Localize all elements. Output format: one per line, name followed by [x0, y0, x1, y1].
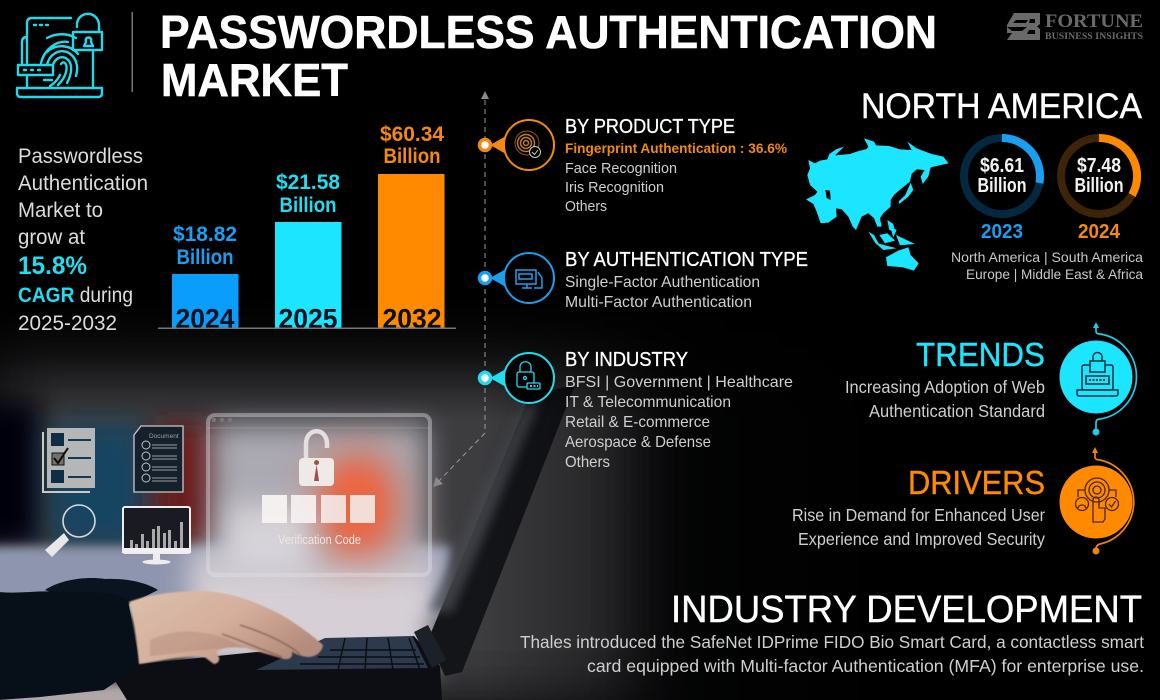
- bar 2032: 2032: [382, 303, 442, 334]
- industry development: INDUSTRY DEVELOPMENT: [671, 589, 1142, 631]
- bar 2025: $21.58: [276, 171, 340, 194]
- bar 2024: $18.82: [173, 223, 237, 246]
- segment: by industry: BY INDUSTRY: [565, 349, 688, 371]
- icon: document: Document: [149, 433, 179, 440]
- bar 2024: [172, 223, 238, 334]
- bar 2025: 2025: [278, 303, 338, 334]
- segment: by industry: [480, 349, 793, 471]
- segment: by industry: BFSI | Government | Healthcare: [565, 374, 793, 391]
- segment: by product type: Iris Recognition: [565, 179, 664, 196]
- bar 2032: Billion: [384, 145, 440, 168]
- drivers: Experience and Improved Security: [798, 529, 1045, 549]
- dashed timeline arrow: [433, 91, 489, 487]
- sleeve far: [45, 578, 158, 606]
- bar 2024: 2024: [176, 303, 235, 334]
- segment: by product type: Face Recognition: [565, 160, 677, 177]
- donut: 2024: [1061, 138, 1137, 243]
- segment: by authentication type: [480, 249, 808, 311]
- donut: 2023: $6.61: [980, 155, 1024, 177]
- icon: laptop fingerprint padlock: [17, 14, 102, 97]
- donut: 2023: Billion: [978, 175, 1026, 197]
- donut: 2024: 2024: [1078, 221, 1121, 243]
- regions list: North America | South America: [951, 249, 1143, 265]
- icon: monitor badge: [480, 253, 554, 303]
- CAGR text block: CAGR during: [18, 284, 133, 307]
- header divider: [132, 12, 133, 92]
- title: MARKET: [161, 54, 348, 106]
- map: Asia Pacific: [806, 138, 949, 271]
- heading: North America: NORTH AMERICA: [861, 87, 1143, 126]
- donut: 2023: 2023: [981, 221, 1023, 243]
- logo: Fortune Business Insights: BUSINESS INSIGHTS: [1045, 32, 1143, 42]
- CAGR text block: [18, 145, 148, 335]
- CAGR text block: 2025-2032: [18, 312, 117, 335]
- floating window: verification code: [207, 415, 430, 575]
- regions list: [951, 249, 1143, 282]
- drivers: Rise in Demand for Enhanced User: [792, 505, 1045, 525]
- donut: 2023: [964, 138, 1040, 243]
- logo: Fortune Business Insights: [1007, 12, 1143, 42]
- segment: by industry: IT & Telecommunication: [565, 394, 731, 411]
- CAGR text block: Authentication: [18, 172, 148, 195]
- fade overlays: [0, 295, 652, 409]
- trends: [845, 322, 1136, 436]
- logo: Fortune Business Insights: FORTUNE: [1045, 12, 1143, 32]
- bar 2032: $60.34: [380, 123, 444, 146]
- drivers: DRIVERS: [908, 464, 1045, 501]
- icon: padlock badge: [480, 353, 554, 403]
- trends: TRENDS: [916, 336, 1045, 373]
- segment: by industry: Retail & E-commerce: [565, 414, 710, 431]
- CAGR text block: Market to: [18, 199, 103, 222]
- trends: Increasing Adoption of Web: [845, 377, 1045, 397]
- drivers: [792, 447, 1134, 554]
- icon: magnifier: [45, 505, 95, 557]
- laptop base: [112, 625, 446, 700]
- segment: by authentication type: Multi-Factor Authentication: [565, 294, 752, 311]
- icon: monitor with bar chart: [122, 507, 191, 564]
- industry development: Thales introduced the SafeNet IDPrime FIDO Bio Smart Card, a contactless smart: [520, 632, 1144, 652]
- bar 2025: Billion: [280, 194, 336, 217]
- industry development: [520, 589, 1144, 676]
- sleeve: [0, 591, 140, 700]
- segment: by product type: [480, 116, 788, 215]
- icon: fingerprint touch badge: [1060, 447, 1134, 554]
- donut: 2024: Billion: [1074, 175, 1124, 197]
- icon: checklist: [43, 428, 95, 492]
- trends: Authentication Standard: [869, 401, 1045, 421]
- icon: document: [134, 426, 183, 492]
- bar 2032: [378, 123, 444, 334]
- segment: by product type: BY PRODUCT TYPE: [565, 116, 735, 138]
- CAGR text block: Passwordless: [18, 145, 143, 168]
- segment: by industry: Others: [565, 454, 610, 471]
- segment: by industry: Aerospace & Defense: [565, 434, 711, 451]
- laptop screen: [428, 385, 575, 676]
- industry development: card equipped with Multi-factor Authentication (MFA) for enterprise use.: [587, 656, 1144, 676]
- CAGR text block: 15.8%: [18, 252, 87, 280]
- title: [160, 6, 937, 106]
- CAGR text block: grow at: [18, 226, 85, 249]
- icon: laptop lock badge: [1060, 322, 1136, 436]
- donut: 2024: $7.48: [1077, 155, 1121, 177]
- icon: fingerprint badge: [480, 120, 554, 170]
- verification code boxes: [262, 495, 375, 523]
- bar 2024: Billion: [176, 246, 234, 269]
- segment: by authentication type: Single-Factor Authentication: [565, 274, 760, 291]
- icon: open padlock: [299, 431, 334, 486]
- label: verification code: Verification Code: [278, 533, 361, 547]
- bar chart: [158, 123, 456, 334]
- background photo: hands typing on a laptop: [0, 334, 675, 700]
- segment: by product type: Fingerprint Authentication : 36.6%: [565, 140, 788, 156]
- hand: [129, 591, 323, 664]
- segment: by product type: Others: [565, 198, 607, 215]
- bar 2025: [275, 171, 342, 334]
- title: PASSWORDLESS AUTHENTICATION: [160, 6, 937, 58]
- segment: by authentication type: BY AUTHENTICATION TYPE: [565, 249, 808, 271]
- regions list: Europe | Middle East & Africa: [966, 266, 1143, 282]
